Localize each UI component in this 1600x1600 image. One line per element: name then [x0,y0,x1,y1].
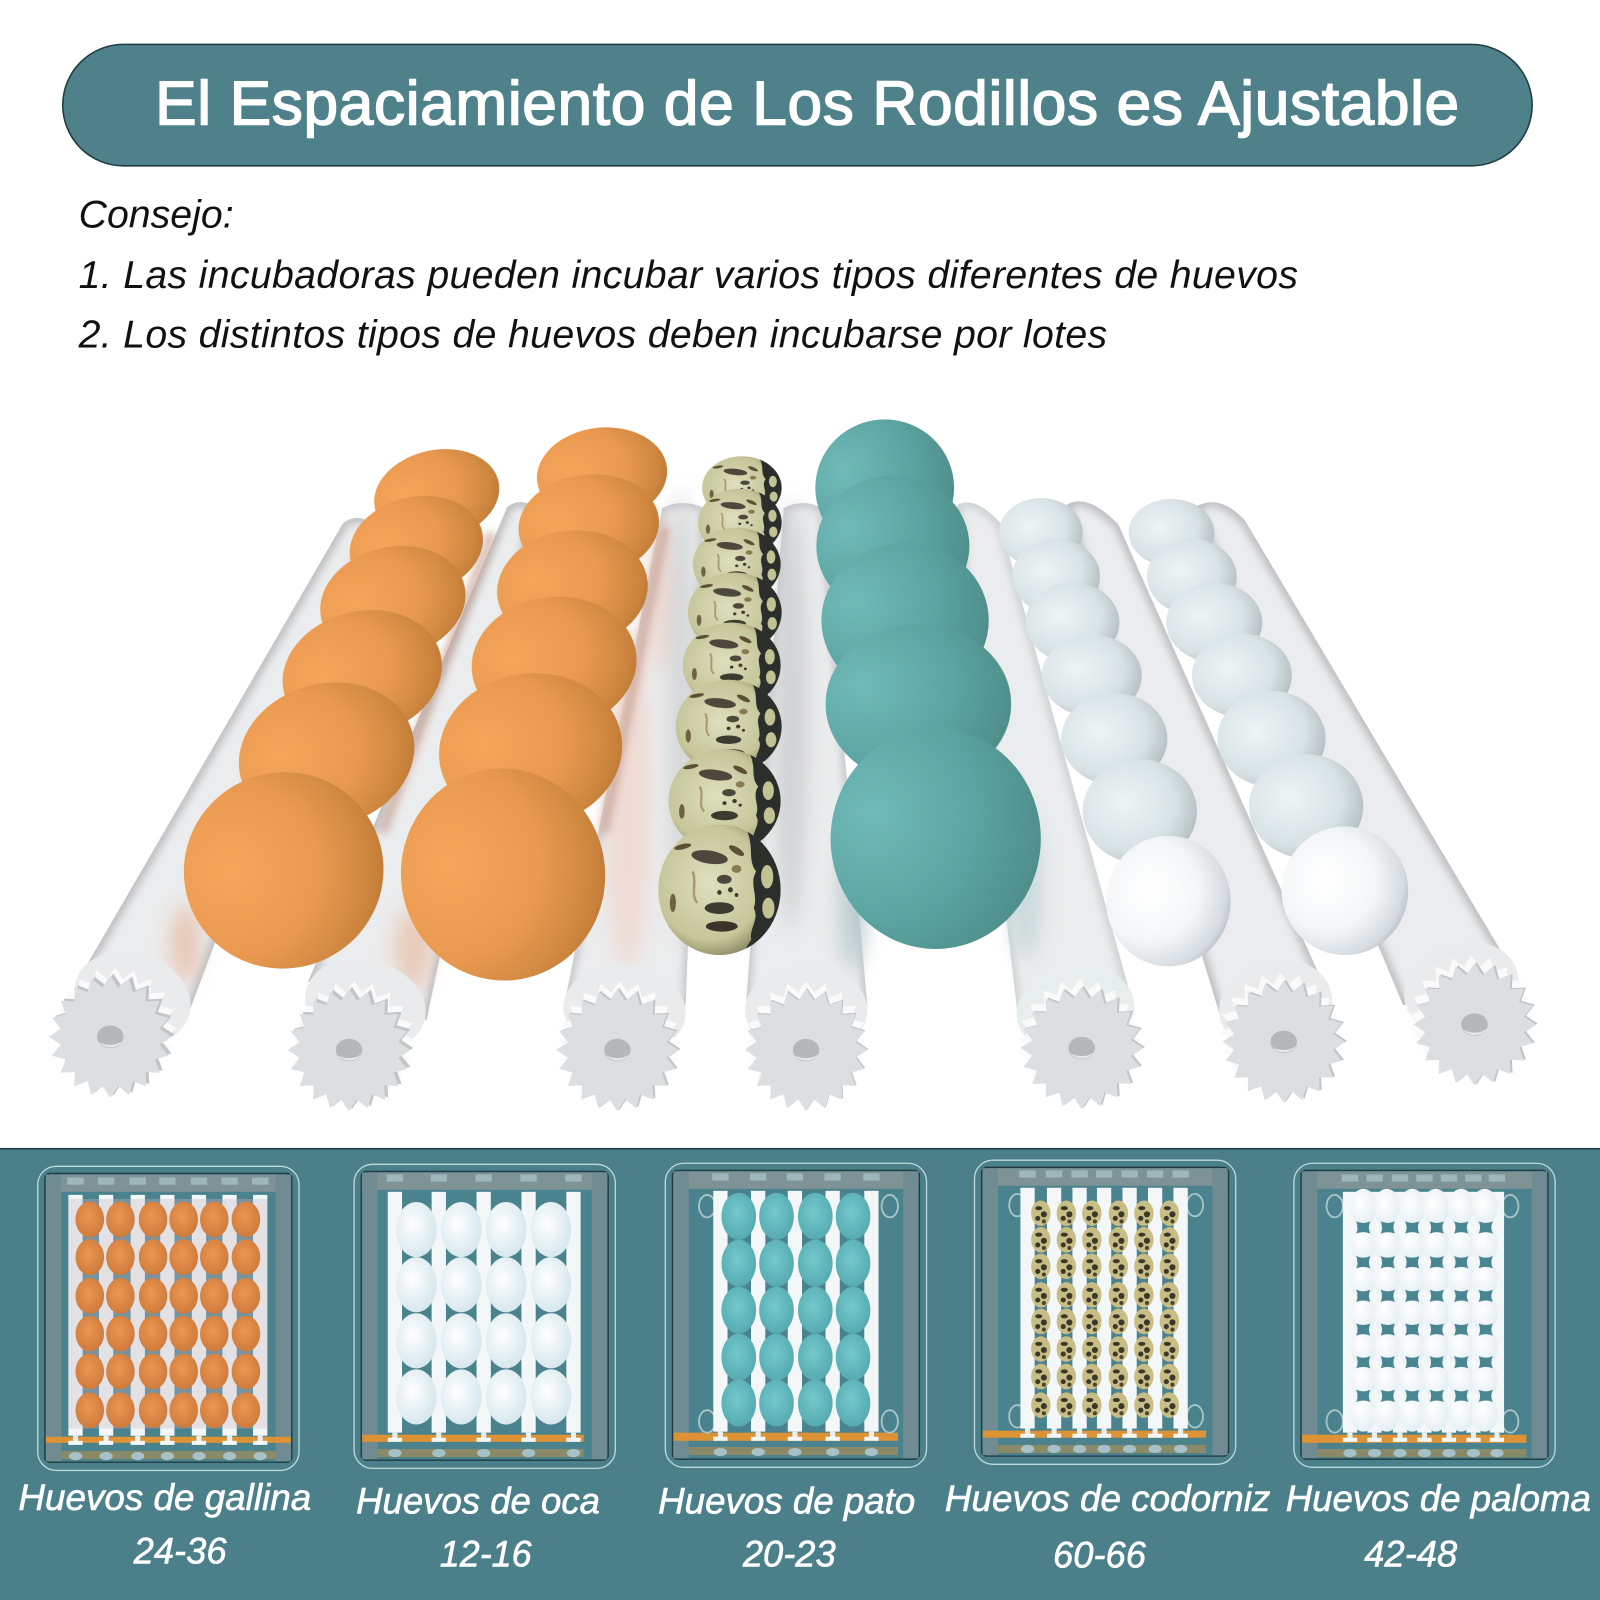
label: chicken eggs: Huevos de gallina [18,1477,311,1518]
egg reflections and shadows on rollers [171,490,1042,990]
label: quail eggs: Huevos de codorniz [945,1478,1270,1519]
duck eggs column [815,419,1041,949]
label: chicken eggs: 24-36 [133,1530,227,1571]
label: goose eggs: Huevos de oca [356,1480,600,1521]
tips text block [78,193,1298,356]
chicken eggs column two [387,421,672,994]
incubator: quail eggs [974,1160,1236,1464]
goose eggs column one [999,498,1231,966]
pigeon eggs column two [1129,499,1408,955]
label: chicken eggs [18,1477,311,1571]
gear side shadows [52,962,1538,1110]
tips text block: 1. Las incubadoras pueden incubar varios tipos diferentes de huevos [79,253,1298,297]
incubator: goose eggs [354,1164,615,1468]
quail eggs column [658,456,793,958]
bottom panel [0,1148,1600,1600]
label: quail eggs: 60-66 [1053,1534,1146,1575]
label: goose eggs: 12-16 [440,1533,532,1574]
label: duck eggs: 20-23 [742,1533,836,1574]
incubator: pigeon eggs [1294,1163,1555,1467]
gear rear teeth [54,955,1533,1103]
chicken eggs column one [158,438,508,994]
label: pigeon eggs: Huevos de paloma [1286,1478,1591,1519]
label: duck eggs [658,1480,915,1574]
label: duck eggs: Huevos de pato [658,1480,915,1521]
roller and eggs illustration [49,419,1538,1111]
label: pigeon eggs: 42-48 [1364,1533,1458,1574]
label: quail eggs [945,1478,1270,1575]
title banner: El Espaciamiento de Los Rodillos es Ajustable [155,69,1459,138]
title banner [63,44,1532,166]
egg shadow lines on rollers [383,527,665,833]
incubator: duck eggs [665,1163,927,1467]
tips text block: Consejo: [79,193,234,237]
rollers [80,501,1520,1020]
roller end caps [62,927,1530,1063]
incubator: chicken eggs [38,1166,299,1470]
tips text block: 2. Los distintos tipos de huevos deben incubarse por lotes [78,312,1107,356]
icon: roller gears [49,963,1536,1111]
label: goose eggs [356,1480,600,1574]
label: pigeon eggs [1286,1478,1591,1574]
